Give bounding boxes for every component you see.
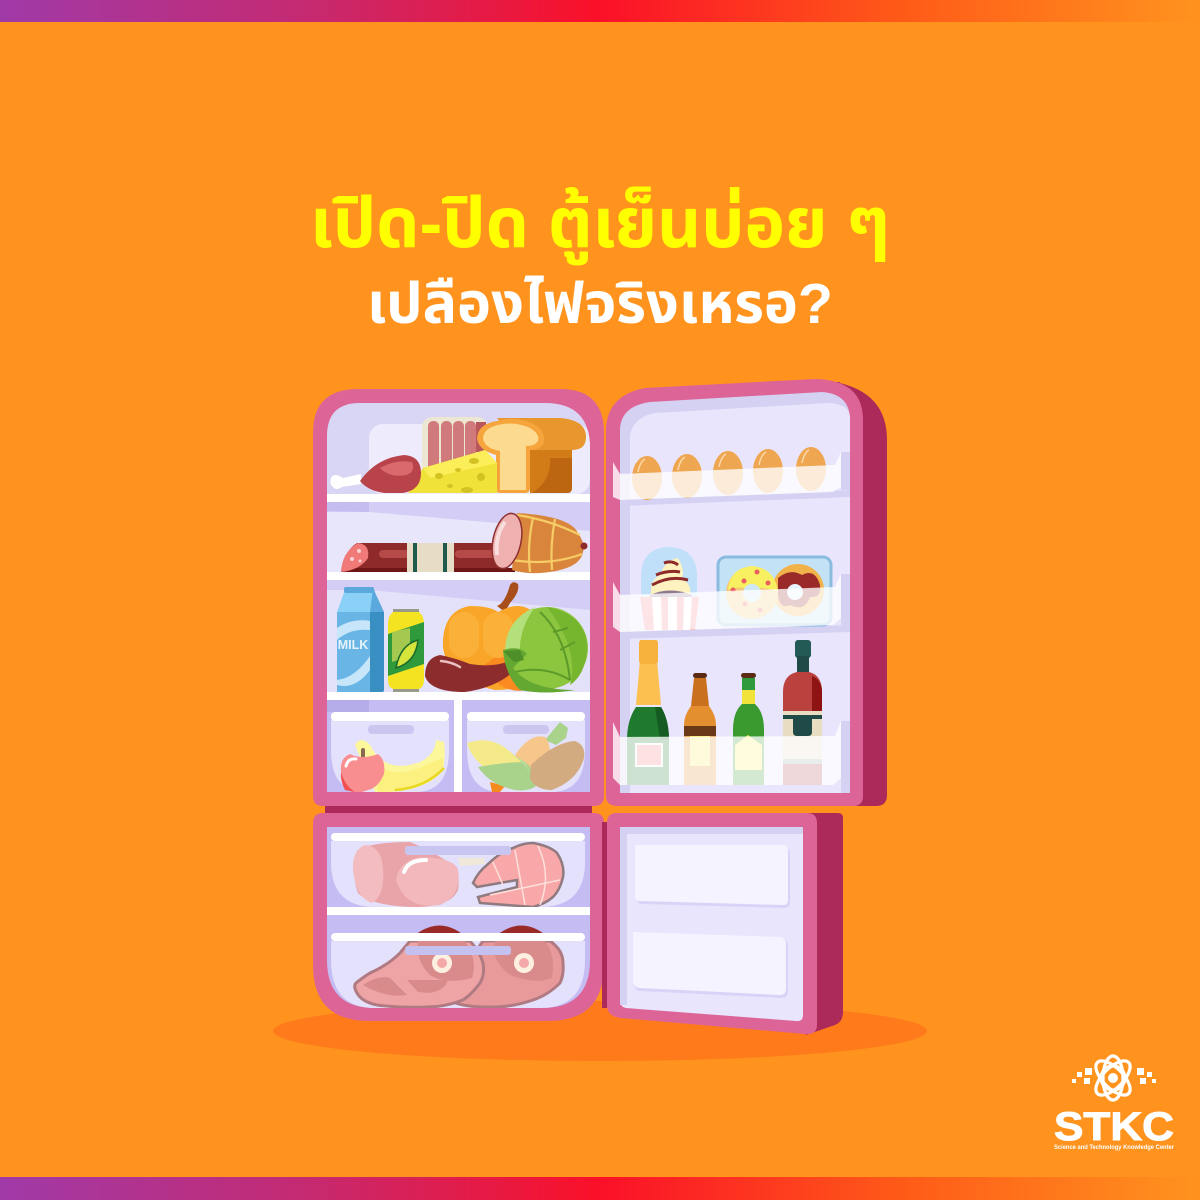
food: pumpkin <box>443 582 533 691</box>
apple <box>341 750 384 792</box>
food: cabbage <box>503 607 588 692</box>
chicken <box>353 842 485 907</box>
food: dark sausage <box>425 655 513 692</box>
steak right <box>453 941 563 1007</box>
shelf <box>327 907 590 915</box>
crisper drawer: vegetables <box>467 712 585 792</box>
banana <box>355 740 445 792</box>
food: soda can <box>388 609 424 692</box>
salmon <box>473 843 563 907</box>
carrot <box>490 722 568 792</box>
eggs <box>632 447 826 500</box>
cupcake <box>640 547 699 630</box>
title: เปิด-ปิด ตู้เย็นบ่อย ๆ <box>310 184 890 265</box>
panel: fridge compartment <box>313 389 604 806</box>
icon: pixel squares <box>1072 1068 1156 1084</box>
logo wordmark: STKC <box>1054 1105 1174 1149</box>
food: bread loaf <box>477 418 586 493</box>
panel: freezer door <box>602 813 843 1035</box>
bottle: wine <box>783 640 822 785</box>
panel: open fridge door <box>606 379 887 806</box>
potato <box>530 741 584 790</box>
floor shadow <box>273 1001 927 1061</box>
egg shelf <box>613 452 841 500</box>
steak left <box>355 941 484 1007</box>
food: cheese <box>408 450 497 493</box>
shelves <box>327 494 590 792</box>
food: drumstick <box>330 455 421 493</box>
title: เปลืองไฟจริงเหรอ? <box>367 272 833 336</box>
food: canned sausages <box>422 417 487 471</box>
freezer drawer: steaks <box>331 926 585 1008</box>
fridge <box>313 379 887 1035</box>
food: milk carton: MILK <box>338 638 368 652</box>
hinge gap between compartments <box>325 804 592 815</box>
food: salami <box>341 543 515 572</box>
bottle shelf <box>613 721 841 785</box>
bottom gradient bar <box>0 1177 1200 1200</box>
freezer drawer: chicken and salmon <box>331 841 585 907</box>
bottle: champagne <box>627 640 669 785</box>
bottle: green beer <box>733 673 764 785</box>
crisper drawer: fruit <box>331 712 449 792</box>
logo tagline: Science and Technology Knowledge Center <box>1054 1145 1175 1151</box>
top gradient bar <box>0 0 1200 22</box>
shelf shadows <box>620 490 850 506</box>
title <box>310 184 890 336</box>
panel: freezer compartment <box>313 813 604 1021</box>
food: ham <box>487 511 588 573</box>
corn <box>467 740 538 790</box>
middle shelf <box>613 574 841 632</box>
bottle: beer <box>684 673 716 785</box>
STKC logo <box>1054 1055 1175 1151</box>
food: milk carton <box>337 587 384 692</box>
donuts <box>718 557 831 625</box>
icon: atom <box>1090 1055 1136 1101</box>
